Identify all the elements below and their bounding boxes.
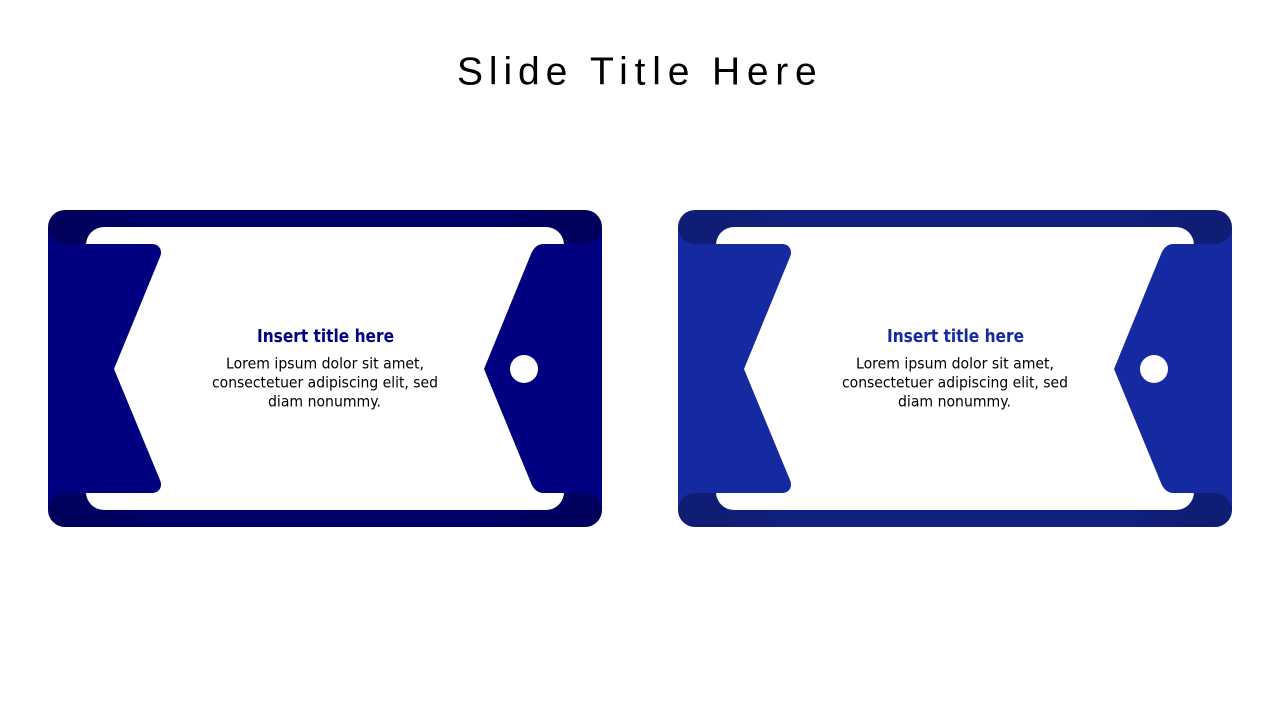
card body text: consectetuer adipiscing elit, sed bbox=[842, 374, 1068, 392]
card body text bbox=[842, 354, 1068, 410]
right arrow tab bbox=[1114, 244, 1232, 493]
title: Title bbox=[590, 50, 696, 94]
panel: right card bbox=[678, 210, 1232, 527]
card body text bbox=[212, 354, 438, 410]
right arrow tab bbox=[484, 244, 602, 493]
card body text: consectetuer adipiscing elit, sed bbox=[212, 374, 438, 392]
icon: white dot bbox=[1140, 355, 1168, 383]
title: Here bbox=[712, 50, 823, 94]
left arrow tab bbox=[48, 244, 161, 493]
card body text: Lorem ipsum dolor sit amet, bbox=[226, 354, 424, 372]
card side backing bbox=[678, 227, 1232, 510]
bottom band bbox=[48, 493, 602, 527]
top band bbox=[678, 210, 1232, 244]
card side backing bbox=[48, 227, 602, 510]
panel: left card bbox=[48, 210, 602, 527]
card body text: Lorem ipsum dolor sit amet, bbox=[856, 354, 1054, 372]
inner white area bbox=[716, 227, 1194, 510]
card heading: Insert title here bbox=[257, 327, 394, 347]
top band bbox=[48, 210, 602, 244]
card heading: Insert title here bbox=[887, 327, 1024, 347]
bottom band bbox=[678, 493, 1232, 527]
left arrow tab bbox=[678, 244, 791, 493]
inner white area bbox=[86, 227, 564, 510]
card body text: diam nonummy. bbox=[268, 392, 381, 410]
title: Slide bbox=[457, 50, 573, 94]
card body text: diam nonummy. bbox=[898, 392, 1011, 410]
icon: white dot bbox=[510, 355, 538, 383]
